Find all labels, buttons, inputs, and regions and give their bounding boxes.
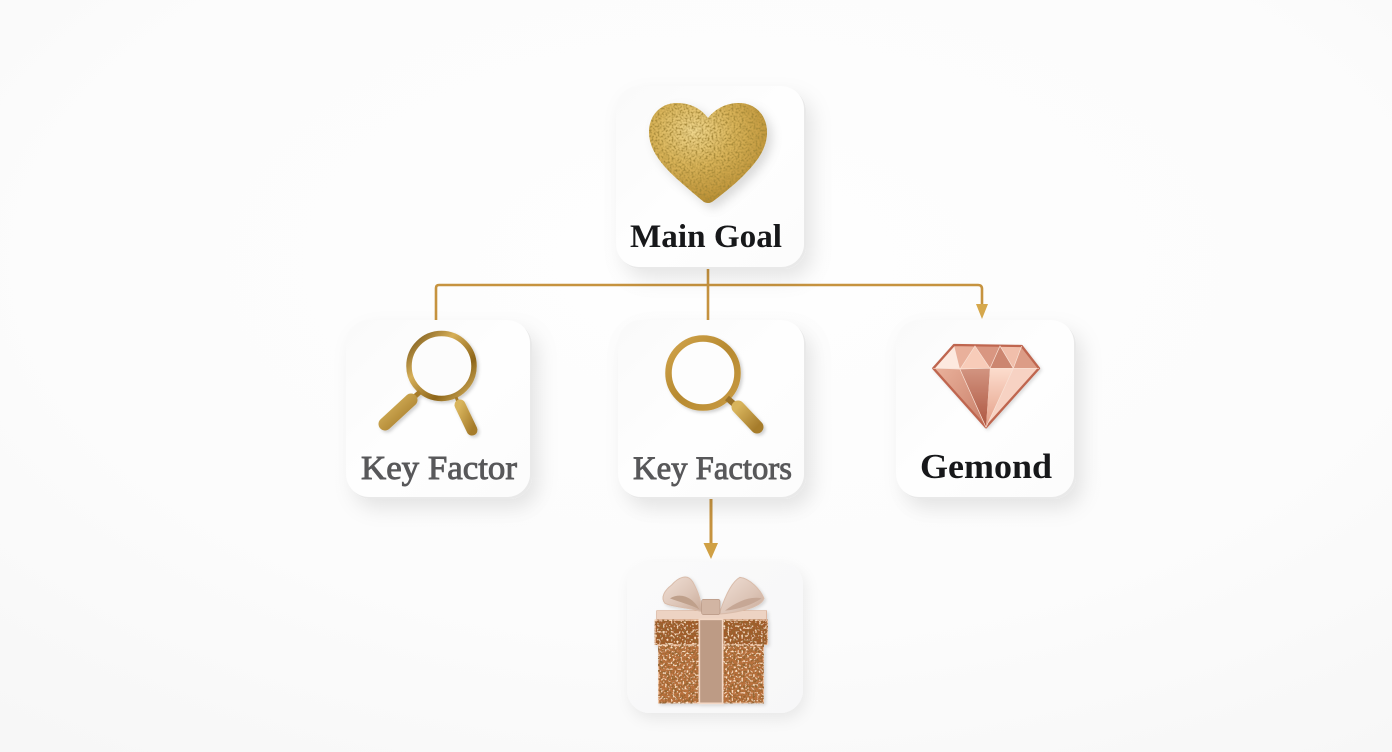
label: key factor: Key Factor: [361, 450, 518, 487]
panel: gift: [627, 562, 803, 713]
panel: key factor: [346, 320, 532, 499]
icon: copper gift box with bow: [655, 577, 768, 703]
panel: main goal: [616, 86, 806, 269]
heading: main goal: Main Goal: [630, 219, 782, 255]
connector: key factors to gift: [704, 499, 718, 559]
panel: gemond: [896, 320, 1076, 499]
panel: key factors: [618, 320, 806, 499]
label: key factors: Key Factors: [633, 451, 792, 487]
icon: rose gold diamond: [933, 345, 1039, 427]
icon: magnifier: [668, 338, 757, 427]
icon: gold heart: [649, 103, 767, 203]
connector: main goal to key factors and gemond: [436, 267, 988, 320]
label: gemond: Gemond: [920, 447, 1053, 486]
icon: magnifier with two handles: [385, 334, 474, 430]
